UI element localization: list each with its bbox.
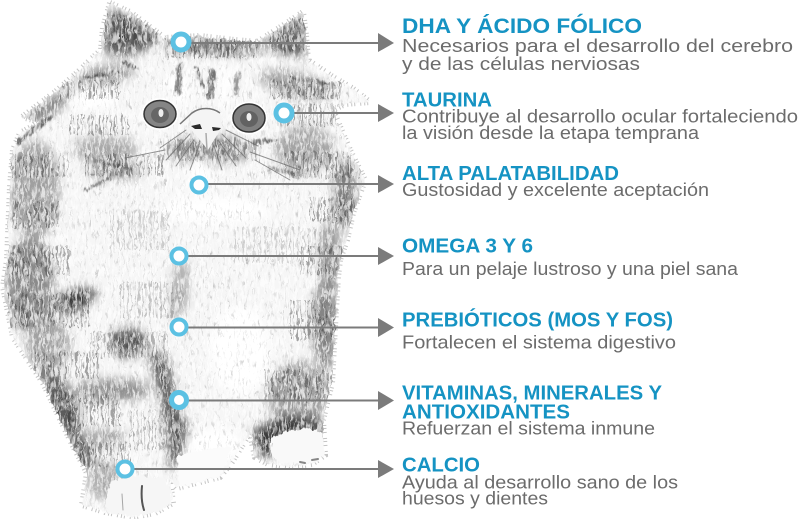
left paw bbox=[106, 475, 171, 516]
dark fur grain bbox=[5, 8, 369, 515]
nose bbox=[180, 108, 222, 150]
callout: DHA y ácido fólico bbox=[173, 14, 793, 74]
callout: prebióticos bbox=[172, 308, 676, 352]
white highlights bbox=[61, 86, 262, 453]
right eye bbox=[230, 102, 268, 134]
marker and arrow 1 bbox=[173, 33, 394, 52]
marker and arrow 7 bbox=[118, 460, 394, 478]
furry outline bbox=[3, 3, 370, 517]
description: Refuerzan el sistema inmune bbox=[402, 418, 655, 438]
callout: calcio bbox=[118, 454, 678, 508]
callout: vitaminas bbox=[172, 382, 663, 438]
heading: DHA Y ÁCIDO FÓLICO bbox=[402, 14, 642, 38]
heading: CALCIO bbox=[402, 454, 480, 476]
description line 2: y de las células nerviosas bbox=[402, 54, 640, 74]
left eye bbox=[142, 98, 178, 130]
description: Gustosidad y excelente aceptación bbox=[402, 180, 709, 200]
heading: OMEGA 3 Y 6 bbox=[402, 236, 533, 258]
marker and arrow 4 bbox=[172, 247, 394, 265]
forehead stripes bbox=[18, 62, 330, 190]
description line 2: huesos y dientes bbox=[402, 488, 548, 508]
description: Ayuda al desarrollo sano de los bbox=[402, 472, 678, 492]
heading line 2: ANTIOXIDANTES bbox=[402, 402, 570, 424]
heading: TAURINA bbox=[402, 90, 492, 112]
marker and arrow 2 bbox=[276, 104, 394, 122]
description: Contribuye al desarrollo ocular fortaleciendo bbox=[402, 106, 798, 126]
belly lower bbox=[176, 446, 232, 487]
fur shading bbox=[6, 8, 356, 500]
heading: VITAMINAS, MINERALES Y bbox=[402, 382, 663, 404]
illustration: kitten bbox=[0, 0, 400, 519]
right paw bbox=[271, 429, 326, 464]
marker and arrow 3 bbox=[192, 175, 394, 193]
callout: alta palatabilidad bbox=[192, 163, 709, 200]
white fur grain bbox=[4, 3, 364, 518]
paw details bbox=[122, 459, 318, 510]
hatching strokes bbox=[5, 30, 360, 455]
description: Para un pelaje lustroso y una piel sana bbox=[402, 259, 739, 279]
kitten body fur bbox=[0, 0, 400, 519]
callout: omega 3 y 6 bbox=[172, 236, 739, 279]
muzzle fur lines bbox=[125, 130, 300, 180]
marker and arrow 5 bbox=[172, 318, 394, 337]
description: Necesarios para el desarrollo del cerebro bbox=[402, 36, 793, 56]
description line 2: la visión desde la etapa temprana bbox=[402, 123, 700, 143]
heading: ALTA PALATABILIDAD bbox=[402, 163, 619, 185]
callout: taurina bbox=[276, 90, 798, 143]
marker and arrow 6 bbox=[172, 391, 394, 410]
heading: PREBIÓTICOS (MOS Y FOS) bbox=[402, 308, 673, 332]
description: Fortalecen el sistema digestivo bbox=[402, 332, 676, 352]
